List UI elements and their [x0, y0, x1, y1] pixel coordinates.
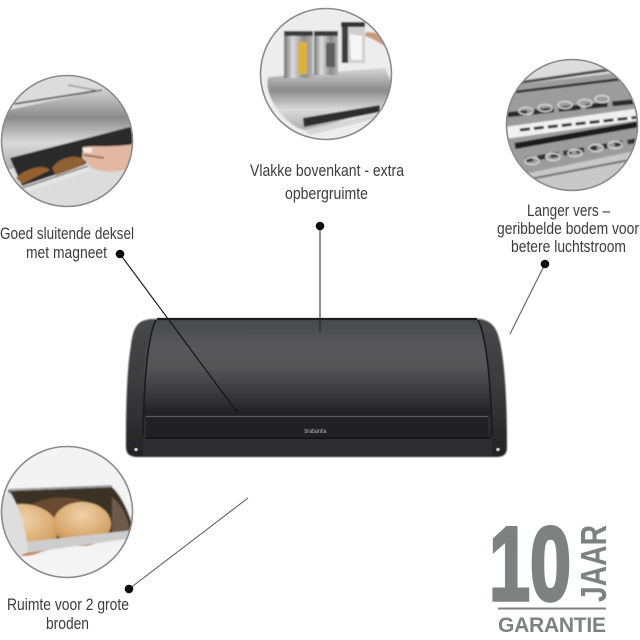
label: bread space: broden [46, 615, 89, 633]
screw right [496, 448, 500, 451]
label: bread space: Ruimte voor 2 grote [7, 596, 129, 614]
brand label: brabantia [304, 429, 327, 435]
handle strip [146, 416, 488, 438]
photo: ribbed bottom [505, 59, 640, 192]
base strip [143, 439, 492, 456]
label: magnet lid [0, 225, 134, 262]
label: ribbed bottom: Langer vers – [527, 202, 611, 220]
lid top edge [157, 318, 477, 320]
photo: lid with magnet [0, 75, 134, 207]
warranty badge [489, 506, 614, 637]
label: bread space [7, 596, 129, 633]
label: flat top: opbergruimte [285, 185, 368, 203]
label: magnet lid: met magneet [26, 244, 107, 262]
label: ribbed bottom [497, 202, 639, 256]
leader line: magnet [116, 250, 237, 412]
label: magnet lid: Goed sluitende deksel [0, 225, 134, 243]
photo: flat top with canisters [260, 8, 400, 140]
label: flat top: Vlakke bovenkant - extra [250, 162, 405, 180]
bin lid [143, 320, 491, 416]
divider [498, 608, 606, 610]
word JAAR: JAAR [573, 525, 614, 602]
number 10: 10 [489, 506, 571, 623]
lid side seams [143, 320, 492, 436]
bread bin [126, 319, 507, 457]
photo: two loaves of bread [0, 446, 134, 580]
screw left [134, 448, 138, 451]
leader line: flat top [316, 222, 324, 332]
leader line: bread space [125, 498, 248, 593]
label: flat top [250, 162, 405, 203]
bin body [126, 319, 507, 457]
word GARANTIE: GARANTIE [498, 614, 606, 637]
leader line: ribbed bottom [510, 260, 549, 334]
